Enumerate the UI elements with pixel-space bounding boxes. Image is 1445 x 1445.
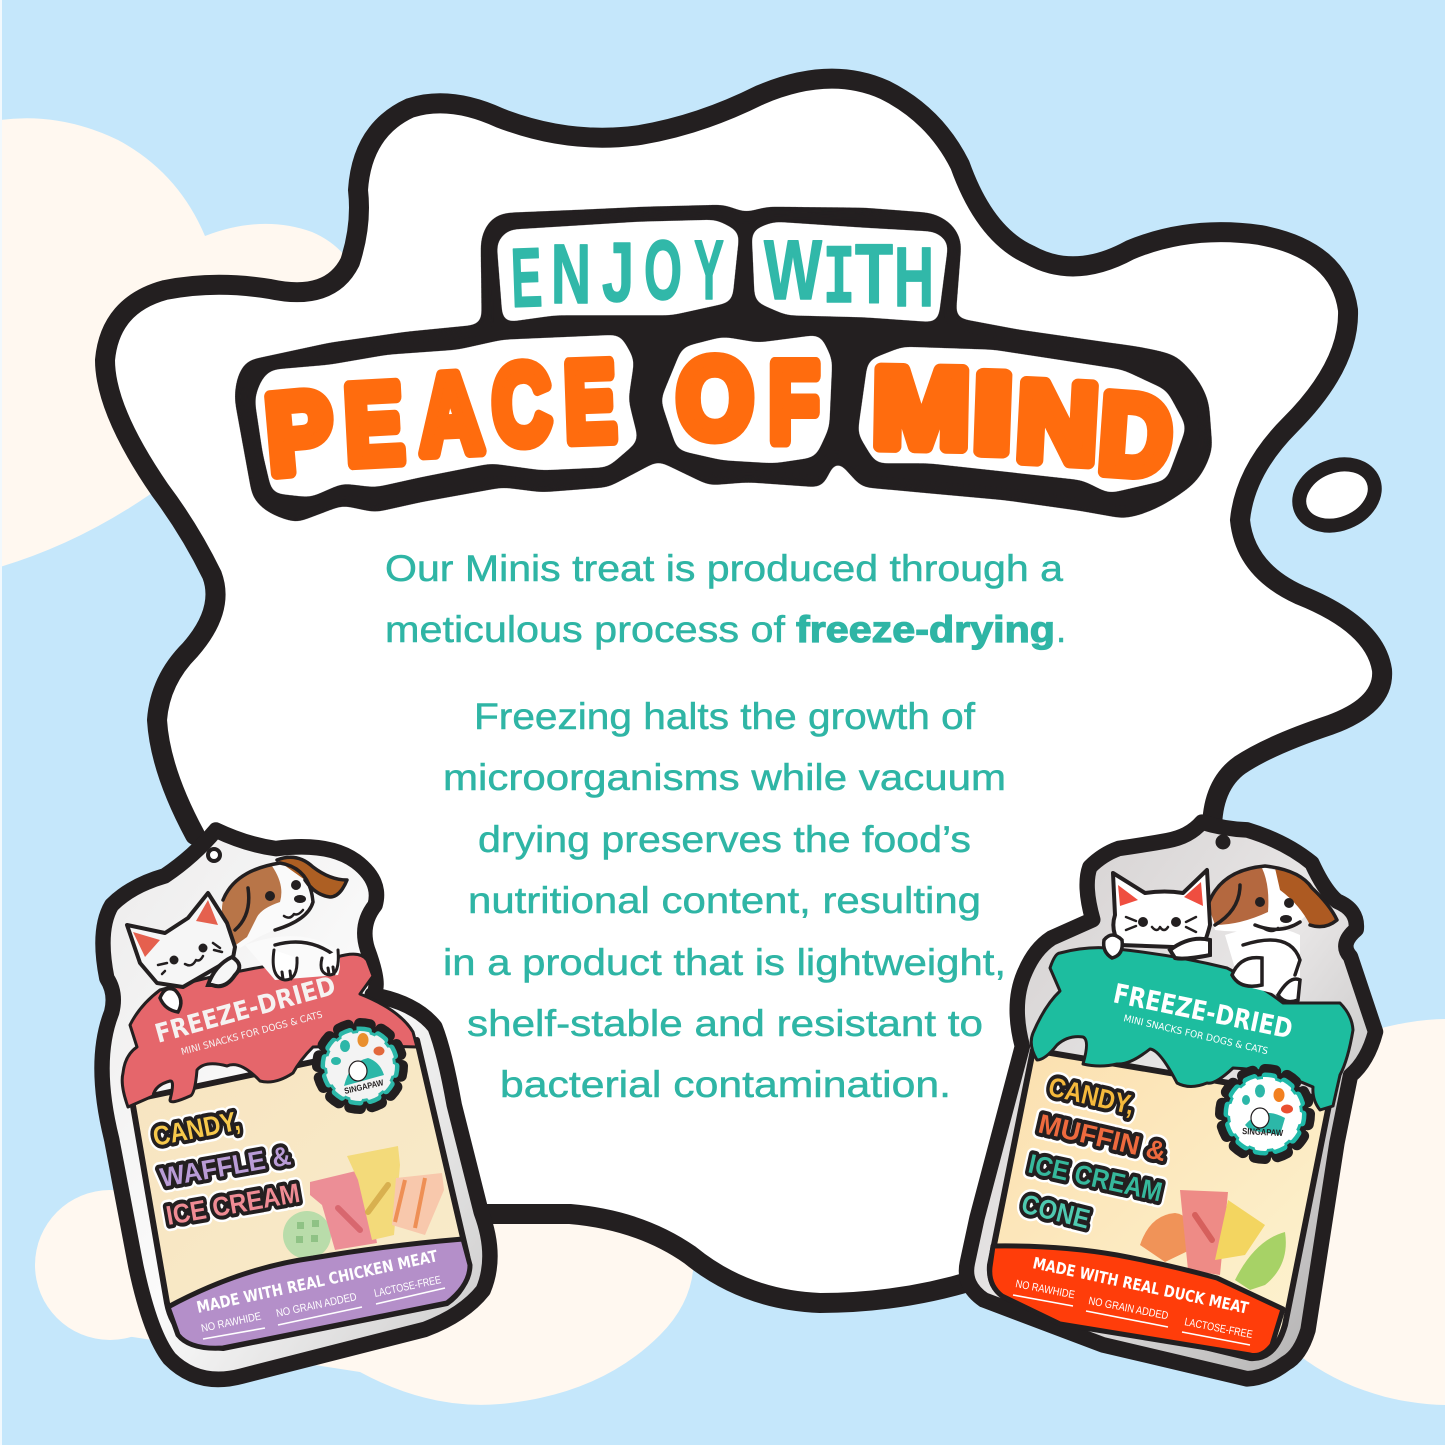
dog paws	[273, 950, 338, 980]
footer claims: NO RAWHIDE	[1014, 1278, 1076, 1301]
body text: intro: meticulous process of	[385, 609, 786, 650]
flavour list: MUFFIN &	[1036, 1109, 1169, 1167]
pack foil with black outline	[102, 830, 490, 1379]
left pack	[102, 830, 490, 1379]
body text: intro	[385, 548, 1066, 650]
title line: enjoy with	[509, 223, 934, 328]
title line: enjoy with: O	[644, 223, 682, 317]
title line: enjoy with: H	[894, 230, 934, 324]
cat	[127, 893, 239, 1012]
hang hole	[208, 849, 220, 861]
badge	[1221, 1070, 1309, 1158]
footer claims: LACTOSE-FREE	[373, 1274, 442, 1300]
title line: enjoy with: E	[509, 230, 544, 325]
title line: peace of mind: O	[677, 336, 753, 461]
teal lid	[1031, 948, 1353, 1110]
dog paws	[1232, 958, 1300, 1002]
footer claims: NO GRAIN ADDED	[1087, 1295, 1169, 1322]
body text: intro: Our Minis treat is produced through a	[385, 548, 1063, 589]
title line: peace of mind: D	[1095, 370, 1176, 500]
purple footer band	[168, 1239, 470, 1348]
pack subtitle: MINI SNACKS FOR DOGS & CATS	[1122, 1013, 1269, 1057]
flavour list: ICE CREAM	[1026, 1149, 1165, 1207]
left edge strip	[0, 0, 2, 1445]
title line: peace of mind: C	[490, 341, 553, 468]
title line: peace of mind: P	[261, 368, 338, 498]
treats	[283, 1146, 444, 1259]
title line: enjoy with: N	[551, 227, 591, 321]
body text: explanation: shelf-stable and resistant to	[467, 1003, 983, 1044]
footer claims: LACTOSE-FREE	[1183, 1316, 1253, 1341]
badge: SINGAPAW	[1242, 1126, 1284, 1138]
flavour list	[1019, 1072, 1169, 1235]
flavour list: CANDY,	[150, 1106, 243, 1152]
title line: enjoy with: J	[602, 225, 634, 319]
right pack	[966, 822, 1376, 1379]
dog	[1208, 866, 1337, 1002]
footer claims: MADE WITH REAL CHICKEN MEAT	[195, 1246, 439, 1317]
flavour list: WAFFLE &	[158, 1140, 293, 1193]
title line: peace of mind: E	[342, 360, 406, 488]
window	[990, 1050, 1330, 1358]
body text: explanation: bacterial contamination.	[500, 1064, 951, 1105]
orange footer band	[990, 1246, 1283, 1356]
title line: enjoy with: I	[823, 233, 855, 328]
badge: SINGAPAW	[343, 1077, 385, 1096]
body text: intro: .	[1056, 609, 1066, 650]
title	[240, 210, 1207, 517]
title line: enjoy with: T	[855, 227, 893, 321]
flavour list: CANDY,	[1046, 1072, 1137, 1120]
cat paw	[160, 989, 181, 1012]
body text: explanation: nutritional content, resulting	[468, 880, 981, 921]
flavour list: CONE	[1019, 1189, 1093, 1235]
speech blob	[105, 79, 1382, 1303]
footer claims	[1013, 1253, 1253, 1345]
footer claims: NO GRAIN ADDED	[275, 1291, 358, 1320]
body text: explanation: in a product that is lightweight,	[443, 942, 1006, 983]
treats	[1140, 1190, 1286, 1290]
title line: peace of mind: A	[416, 350, 485, 478]
title line: peace of mind: M	[872, 345, 971, 472]
title line: peace of mind: I	[971, 350, 1015, 476]
red lid	[122, 954, 417, 1107]
badge	[318, 1024, 402, 1108]
window	[132, 1040, 468, 1348]
droplet	[1290, 454, 1384, 536]
body text: explanation: microorganisms while vacuum	[443, 757, 1006, 798]
footer claims: NO RAWHIDE	[200, 1311, 262, 1335]
flavour list	[150, 1106, 302, 1231]
pack title: FREEZE-DRIED	[1111, 978, 1295, 1045]
title line: peace of mind: F	[769, 340, 819, 465]
hang hole	[1216, 834, 1230, 850]
dog	[221, 857, 347, 980]
cat paw	[1104, 935, 1122, 958]
body text: explanation: drying preserves the food’s	[478, 819, 971, 860]
pack foil with black outline	[966, 822, 1376, 1379]
title line: enjoy with: Y	[694, 223, 724, 317]
pack subtitle: MINI SNACKS FOR DOGS & CATS	[180, 1009, 324, 1058]
title line: enjoy with: W	[764, 223, 823, 317]
pack title: FREEZE-DRIED	[152, 971, 339, 1050]
body text: explanation	[443, 696, 1006, 1105]
title line: peace of mind	[261, 336, 1176, 500]
flavour list: ICE CREAM	[164, 1178, 302, 1231]
body text: intro: freeze-drying	[796, 609, 1055, 650]
body text: explanation: Freezing halts the growth of	[474, 696, 976, 737]
title line: peace of mind: E	[562, 338, 618, 465]
footer claims	[195, 1246, 445, 1339]
title line: peace of mind: N	[1014, 358, 1101, 487]
cat	[1104, 870, 1210, 959]
footer claims: MADE WITH REAL DUCK MEAT	[1031, 1253, 1250, 1318]
